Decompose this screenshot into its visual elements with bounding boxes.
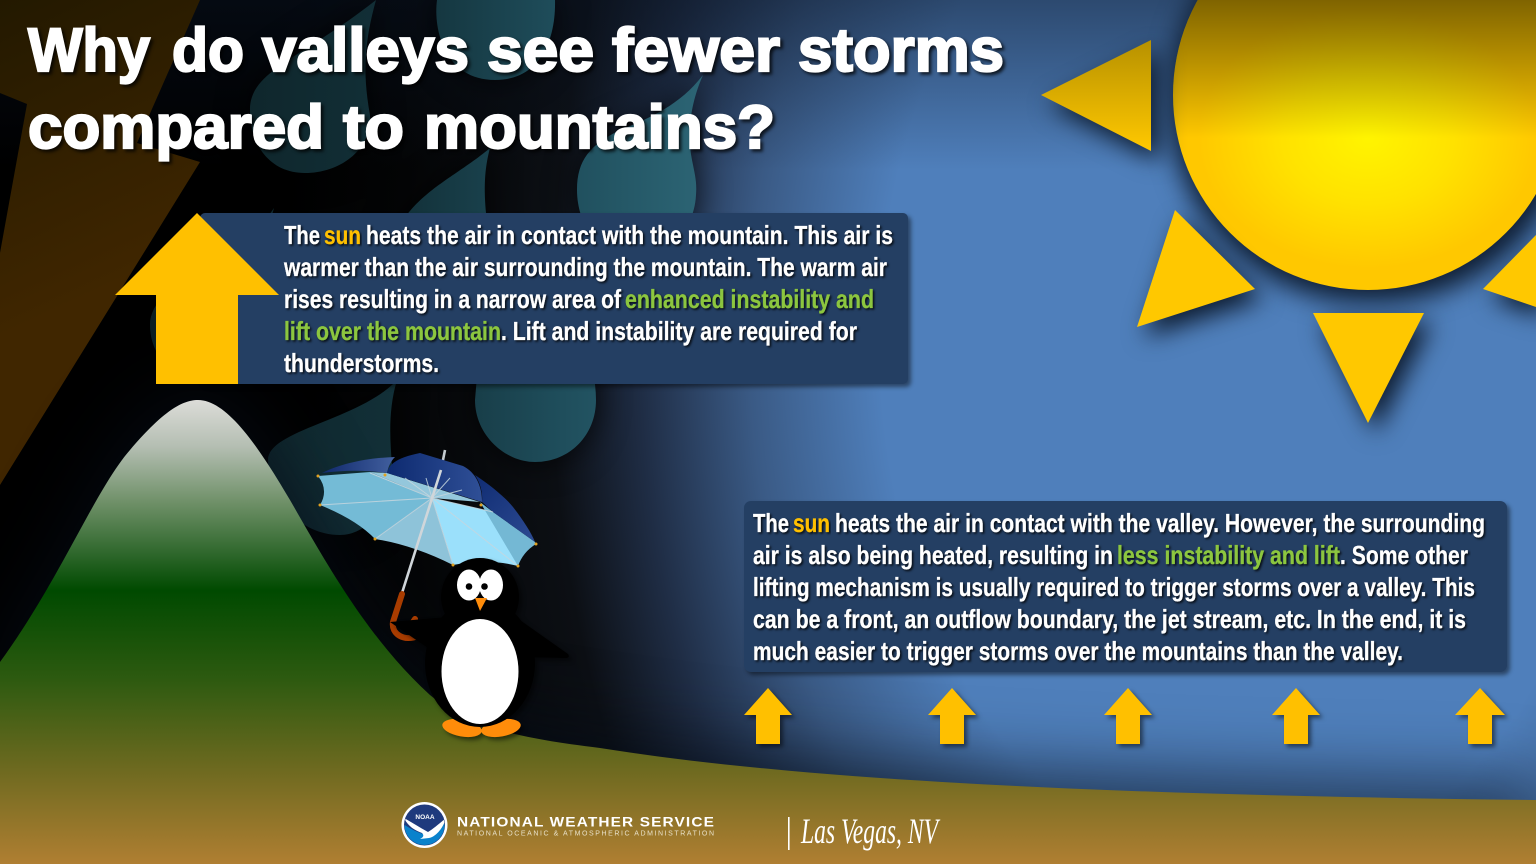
mountain text: sun	[324, 220, 361, 250]
umbrella shaft	[402, 470, 441, 593]
umbrella shaft tip	[441, 450, 445, 470]
mountain text: . Lift and instability are required for	[501, 316, 857, 346]
icon: NOAA logo: NOAA	[415, 814, 435, 821]
icon: umbrella	[316, 450, 538, 638]
large rising air arrow	[115, 213, 279, 384]
background mountains	[0, 0, 200, 485]
sun ray bottom	[1313, 313, 1424, 423]
mountain text: The	[284, 220, 320, 250]
valley text: The	[753, 508, 789, 538]
umbrella ribs	[320, 473, 518, 566]
icon: NOAA logo	[402, 802, 448, 848]
valley text: less instability and lift	[1117, 540, 1340, 570]
penguin feet	[441, 716, 522, 740]
title: to	[343, 93, 404, 161]
title: fewer	[612, 16, 780, 84]
umbrella canopy underside	[318, 472, 536, 566]
sun ray right	[1483, 235, 1536, 307]
location: Las Vegas, NV	[800, 811, 941, 851]
valley text	[753, 508, 1485, 666]
panel: mountain explanation	[115, 213, 908, 384]
sun ray left	[1041, 40, 1151, 151]
panel: valley explanation	[744, 501, 1507, 672]
mountain text: lift over the mountain	[284, 316, 501, 346]
penguin beak	[475, 598, 487, 611]
mountain text: heats the air in contact with the mountain. This air is	[366, 220, 893, 250]
mountain text: thunderstorms.	[284, 348, 439, 378]
penguin belly	[442, 619, 518, 724]
valley text: . Some other	[1340, 540, 1468, 570]
small rising air arrows	[744, 688, 1505, 744]
title: compared	[28, 93, 324, 161]
title: see	[487, 16, 594, 84]
title: storms	[798, 16, 1004, 84]
valley text: much easier to trigger storms over the mountains than the valley.	[753, 636, 1403, 666]
mountain text: warmer than the air surrounding the mountain. The warm air	[283, 252, 887, 282]
icon: penguin	[390, 558, 569, 740]
ground and mountain	[0, 400, 1536, 864]
sun disc	[1173, 0, 1536, 290]
divider	[788, 817, 790, 850]
valley text: sun	[793, 508, 830, 538]
mountain text	[283, 220, 893, 378]
sun	[1041, 0, 1536, 423]
footer: NWS branding	[400, 802, 941, 851]
umbrella tips	[316, 474, 538, 568]
mountain text: rises resulting in a narrow area of	[284, 284, 621, 314]
mountain text: enhanced instability and	[625, 284, 874, 314]
panel background	[744, 501, 1507, 672]
penguin eyes	[457, 570, 503, 600]
valley text: air is also being heated, resulting in	[753, 540, 1113, 570]
umbrella handle	[393, 594, 418, 638]
penguin head	[441, 558, 519, 636]
title: Why	[28, 16, 150, 84]
title	[28, 16, 1004, 161]
title: do	[172, 16, 244, 84]
background raindrops	[150, 0, 703, 535]
title: valleys	[262, 16, 469, 84]
panel background	[200, 213, 908, 384]
agency name: NATIONAL WEATHER SERVICE	[457, 814, 715, 830]
title: mountains?	[424, 93, 775, 161]
penguin wings	[390, 617, 569, 658]
penguin body	[425, 599, 535, 727]
agency subtitle: NATIONAL OCEANIC & ATMOSPHERIC ADMINISTRATION	[457, 830, 714, 838]
umbrella canopy top	[322, 453, 535, 542]
sun ray lower left	[1137, 210, 1255, 327]
